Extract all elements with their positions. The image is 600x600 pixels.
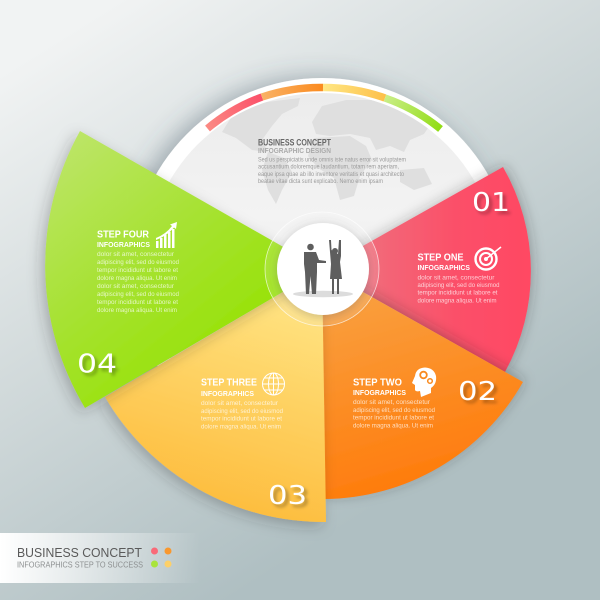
icon: two business people	[293, 240, 353, 297]
text block: step three	[201, 400, 283, 430]
heading: step two: INFOGRAPHICS	[353, 388, 406, 397]
heading: step two	[353, 376, 406, 397]
text block: step two: tempor incididunt ut labore et	[353, 414, 434, 422]
text block: step two: dolore magna aliqua. Ut enim	[353, 422, 433, 430]
heading: step one	[418, 252, 470, 272]
text block: concept description	[258, 156, 406, 185]
number 03: 03	[268, 481, 307, 511]
text block: step three: dolore magna aliqua. Ut enim	[201, 424, 281, 430]
text block: concept description: beatae vitae dicta sunt explicabo. Nemo enim ipsam	[258, 178, 383, 185]
panel: step four wedge	[45, 131, 322, 408]
heading: step three	[201, 376, 257, 398]
text block: step one	[418, 274, 500, 304]
panel: step two wedge	[322, 269, 523, 499]
text block: step one: dolore magna aliqua. Ut enim	[418, 298, 496, 304]
central hub with glass ring	[265, 212, 379, 326]
heading: step four: INFOGRAPHICS	[97, 240, 150, 249]
world map	[222, 98, 432, 204]
heading: step four	[97, 228, 150, 249]
text block: step one: adipiscing elit, sed do eiusmod	[418, 282, 500, 289]
text block: step four	[97, 251, 179, 314]
text block: step two	[353, 399, 435, 430]
number 04: 04	[77, 350, 117, 380]
panel: top concept disc	[140, 66, 491, 374]
icon: growth chart	[156, 222, 177, 248]
text block: concept description: accusantium doloremque laudantium, totam rem aperiam,	[258, 164, 399, 170]
number 02: 02	[458, 377, 497, 407]
text block: step four: adipiscing elit, sed do eiusmod	[97, 291, 179, 298]
text block: step four: tempor incididunt ut labore et	[97, 267, 178, 274]
heading: step one: STEP ONE	[418, 252, 464, 264]
heading: step one: INFOGRAPHICS	[418, 263, 470, 272]
text block: step four: tempor incididunt ut labore et	[97, 299, 178, 306]
heading: step three: INFOGRAPHICS	[201, 389, 254, 398]
heading: step four: STEP FOUR	[97, 228, 149, 240]
heading: business concept	[258, 138, 331, 155]
icon: four coloured dots	[151, 548, 172, 568]
text block: step one: tempor incididunt ut labore et	[418, 290, 498, 296]
icon: head with gears	[412, 368, 436, 397]
text block: step four: adipiscing elit, sed do eiusmod	[97, 259, 179, 266]
text block: step two: dolor sit amet, consectetur	[353, 399, 430, 406]
icon: globe	[262, 373, 284, 395]
text block: step four: dolore magna aliqua. Ut enim	[97, 307, 177, 314]
heading: business concept: BUSINESS CONCEPT	[258, 138, 331, 148]
text block: step three: adipiscing elit, sed do eiusmod	[201, 408, 283, 415]
heading: business concept: INFOGRAPHIC DESIGN	[258, 146, 331, 155]
heading: step two: STEP TWO	[353, 376, 402, 388]
text block: step four: dolore magna aliqua. Ut enim	[97, 275, 177, 282]
text block: step three: dolor sit amet, consectetur	[201, 400, 278, 407]
heading: step three: STEP THREE	[201, 376, 257, 388]
text block: step two: adipiscing elit, sed do eiusmod	[353, 407, 435, 414]
icon: target	[476, 247, 501, 270]
footer banner: BUSINESS CONCEPT	[17, 545, 142, 560]
text block: step one: dolor sit amet, consectetur	[418, 274, 494, 282]
text block: step three: tempor incididunt ut labore et	[201, 416, 282, 422]
panel: step three wedge	[105, 269, 326, 522]
text block: step four: dolor sit amet, consectetur	[97, 251, 174, 258]
footer banner	[0, 533, 200, 583]
text block: concept description: Sed us perspiciatis unde omnis iste natus error sit voluptatem	[258, 156, 406, 164]
text block: step four: dolor sit amet, consectetur	[97, 283, 174, 290]
progress arc: four colour segments	[208, 87, 440, 129]
number 01: 01	[472, 188, 510, 218]
footer banner: INFOGRAPHICS STEP TO SUCCESS	[17, 560, 143, 570]
panel: step one wedge	[322, 167, 531, 372]
text block: concept description: eaque ipsa quae ab illo inventore veritatis et quasi architecto	[258, 171, 404, 178]
